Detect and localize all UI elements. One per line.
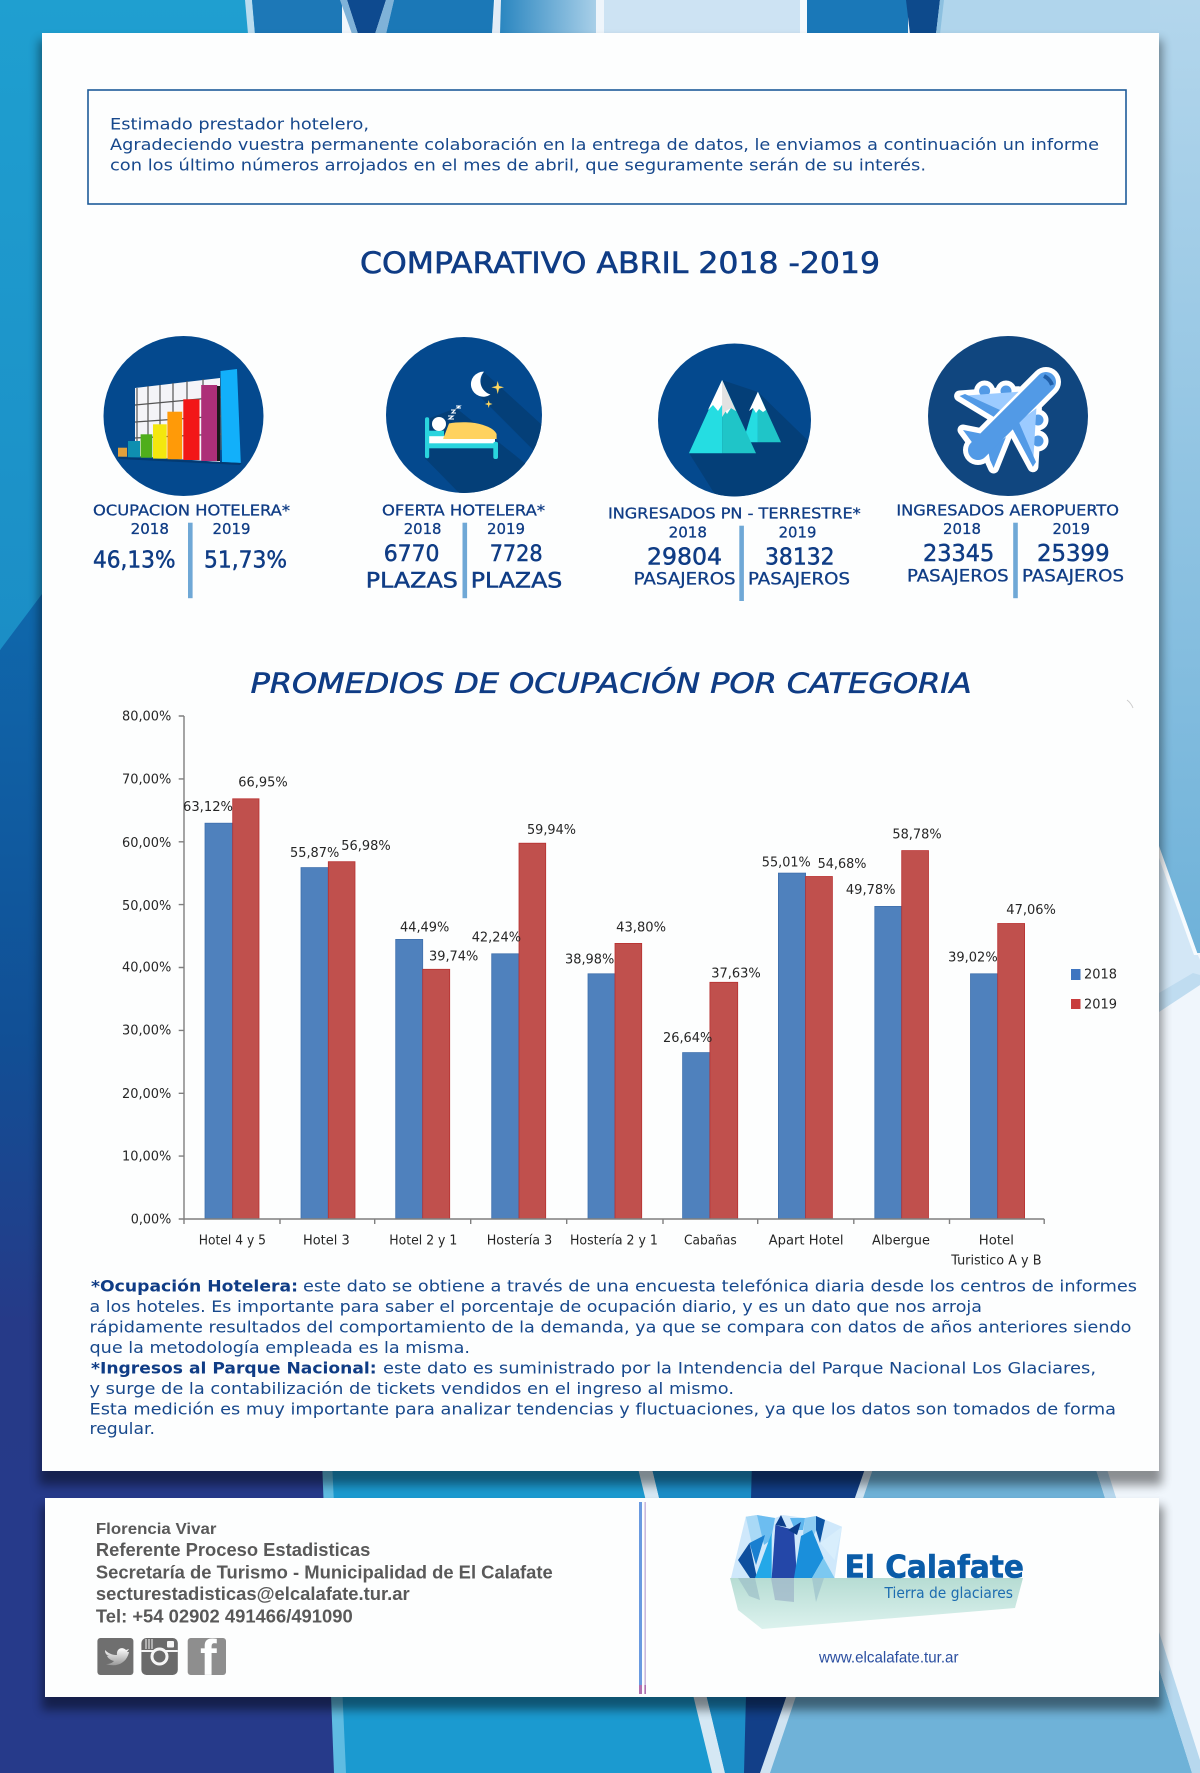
bars 2018 xyxy=(205,823,998,1219)
value labels: 37,63% xyxy=(711,967,761,982)
website: www.elcalafate.tur.ar xyxy=(818,1650,959,1667)
notes text block: y surge de la contabilización de tickets vendidos en el ingreso al mismo. xyxy=(90,1379,734,1398)
y axis labels: 30,00% xyxy=(122,1024,171,1039)
years xyxy=(404,520,525,538)
values: 46,13% xyxy=(93,548,176,574)
value labels: 43,80% xyxy=(616,920,666,936)
notes text block: *Ocupación Hotelera: xyxy=(91,1276,298,1296)
stat: ocupacion hotelera xyxy=(93,336,290,598)
y axis labels: 50,00% xyxy=(122,899,171,914)
years: 2018 xyxy=(943,520,981,538)
category labels: Hotel 2 y 1 xyxy=(389,1234,457,1249)
category labels: Turistico A y B xyxy=(950,1253,1042,1268)
divider xyxy=(188,523,193,598)
value labels: 58,78% xyxy=(892,827,942,842)
y axis labels: 60,00% xyxy=(122,836,171,851)
category labels: Hostería 3 xyxy=(487,1234,552,1249)
icon: sleeping person in bed xyxy=(386,337,542,493)
y axis labels: 70,00% xyxy=(122,772,171,788)
values: PLAZAS xyxy=(366,569,458,594)
icon: 3D bar chart xyxy=(104,336,264,496)
values: 23345 xyxy=(923,541,994,567)
years: 2019 xyxy=(1052,520,1090,538)
notes text block xyxy=(90,1276,1137,1438)
value labels: 39,02% xyxy=(948,951,998,966)
years: 2018 xyxy=(404,520,442,538)
icon: facebook: f xyxy=(200,1630,217,1686)
icon: instagram xyxy=(141,1638,178,1675)
values: PLAZAS xyxy=(471,569,562,594)
values xyxy=(93,548,287,574)
years xyxy=(669,523,816,541)
years xyxy=(943,520,1090,538)
vertical divider xyxy=(639,1502,646,1694)
values xyxy=(634,544,850,588)
category labels: Hotel 4 y 5 xyxy=(199,1234,266,1249)
contact details: Referente Proceso Estadisticas xyxy=(96,1540,370,1560)
value labels: 56,98% xyxy=(341,839,391,854)
value labels: 47,06% xyxy=(1006,903,1056,918)
notes text block: regular. xyxy=(90,1419,155,1438)
intro message box xyxy=(88,90,1126,204)
y axis labels: 40,00% xyxy=(122,961,171,976)
value labels: 39,74% xyxy=(429,949,478,964)
category labels xyxy=(199,1234,1041,1268)
y axis labels: 20,00% xyxy=(122,1087,171,1102)
icon: facebook xyxy=(188,1630,226,1686)
notes text block: a los hoteles. Es importante para saber el porcentaje de ocupación diario, y es un dato que nos arroja xyxy=(90,1297,982,1316)
divider xyxy=(462,523,467,598)
divider xyxy=(1013,523,1018,598)
y axis labels: 0,00% xyxy=(131,1213,171,1228)
years: 2019 xyxy=(212,520,250,538)
footer panel xyxy=(45,1498,1159,1697)
notes text block: *Ingresos al Parque Nacional: xyxy=(91,1358,377,1378)
logo: El Calafate: El Calafate xyxy=(845,1550,1024,1586)
value labels: 66,95% xyxy=(238,776,288,791)
contact details: Secretaría de Turismo - Municipalidad de El Calafate xyxy=(96,1562,553,1582)
icon: twitter xyxy=(97,1638,133,1675)
values: 25399 xyxy=(1037,541,1110,567)
years: 2019 xyxy=(779,523,816,541)
intro message box: Estimado prestador hotelero, xyxy=(110,114,369,134)
main white panel xyxy=(42,33,1159,1471)
value labels: 44,49% xyxy=(400,920,449,936)
value labels: 55,01% xyxy=(762,856,811,871)
icon: snowy mountains xyxy=(658,344,811,496)
value labels: 26,64% xyxy=(663,1031,712,1046)
label: INGRESADOS PN - TERRESTRE* xyxy=(608,505,861,523)
category labels: Hotel 3 xyxy=(303,1234,350,1249)
stat: ingresados aeropuerto xyxy=(896,336,1124,598)
value labels: 59,94% xyxy=(527,823,576,838)
value labels: 63,12% xyxy=(183,800,233,815)
notes text block: Esta medición es muy importante para analizar tendencias y fluctuaciones, ya que los datos son tomados de forma xyxy=(90,1400,1116,1418)
title: promedios: PROMEDIOS DE OCUPACIÓN POR CATEGORIA xyxy=(251,665,972,699)
stat: oferta hotelera xyxy=(366,337,562,598)
bars 2019 xyxy=(233,799,1025,1219)
category labels: Hotel xyxy=(979,1234,1014,1249)
values xyxy=(366,541,562,594)
y axis labels xyxy=(122,710,171,1228)
value labels: 49,78% xyxy=(846,883,896,898)
values: 51,73% xyxy=(204,548,287,574)
value labels xyxy=(183,776,1056,1046)
category labels: Hostería 2 y 1 xyxy=(570,1234,658,1249)
bar chart: promedios de ocupacion xyxy=(122,710,1117,1268)
contact details: Florencia Vivar xyxy=(96,1521,216,1538)
contact details: secturestadisticas@elcalafate.tur.ar xyxy=(96,1584,410,1604)
years: 2019 xyxy=(487,520,525,538)
values: PASAJEROS xyxy=(907,566,1009,585)
years xyxy=(131,520,250,538)
category labels: Albergue xyxy=(872,1234,930,1249)
legend: 2019 xyxy=(1084,998,1117,1013)
logo: El Calafate: Tierra de glaciares xyxy=(884,1584,1013,1602)
intro message box: con los último números arrojados en el mes de abril, que seguramente serán de su interés. xyxy=(110,156,926,174)
values: PASAJEROS xyxy=(634,569,736,588)
values: 7728 xyxy=(490,541,543,567)
axes xyxy=(179,716,1044,1224)
values: 38132 xyxy=(765,544,835,570)
intro message box: Agradeciendo vuestra permanente colaboración en la entrega de datos, le enviamos a continuación un informe xyxy=(110,135,1099,154)
value labels: 42,24% xyxy=(472,930,521,946)
divider xyxy=(739,526,744,601)
notes text block: rápidamente resultados del comportamiento de la demanda, ya que se compara con datos de años anteriores siendo xyxy=(90,1318,1132,1336)
years: 2018 xyxy=(669,523,707,541)
notes text block: este dato es suministrado por la Intendencia del Parque Nacional Los Glaciares, xyxy=(383,1358,1096,1378)
legend xyxy=(1071,968,1117,1013)
category labels: Apart Hotel xyxy=(769,1234,844,1249)
values: 6770 xyxy=(384,541,440,567)
values: 29804 xyxy=(647,544,722,570)
category labels: Cabañas xyxy=(684,1234,737,1249)
y axis labels: 10,00% xyxy=(122,1150,171,1164)
label: OCUPACION HOTELERA* xyxy=(93,502,290,520)
label: OFERTA HOTELERA* xyxy=(382,502,545,520)
notes text block: este dato se obtiene a través de una encuesta telefónica diaria desde los centros de informes xyxy=(303,1276,1137,1296)
values xyxy=(907,541,1124,585)
legend: 2018 xyxy=(1084,968,1117,983)
value labels: 38,98% xyxy=(565,952,614,967)
values: PASAJEROS xyxy=(748,569,850,588)
logo: El Calafate xyxy=(730,1515,1024,1629)
value labels: 55,87% xyxy=(290,846,339,861)
value labels: 54,68% xyxy=(818,857,866,872)
notes text block: que la metodología empleada es la misma. xyxy=(90,1338,470,1357)
years: 2018 xyxy=(131,520,169,538)
stat: ingresados PN terrestre xyxy=(608,344,861,601)
icon: airplane xyxy=(928,336,1088,496)
contact details xyxy=(96,1521,553,1626)
title: comparativo: COMPARATIVO ABRIL 2018 -2019 xyxy=(360,246,880,280)
label: INGRESADOS AEROPUERTO xyxy=(896,502,1119,520)
y axis labels: 80,00% xyxy=(122,710,171,725)
contact details: Tel: +54 02902 491466/491090 xyxy=(96,1606,353,1626)
values: PASAJEROS xyxy=(1022,566,1124,585)
